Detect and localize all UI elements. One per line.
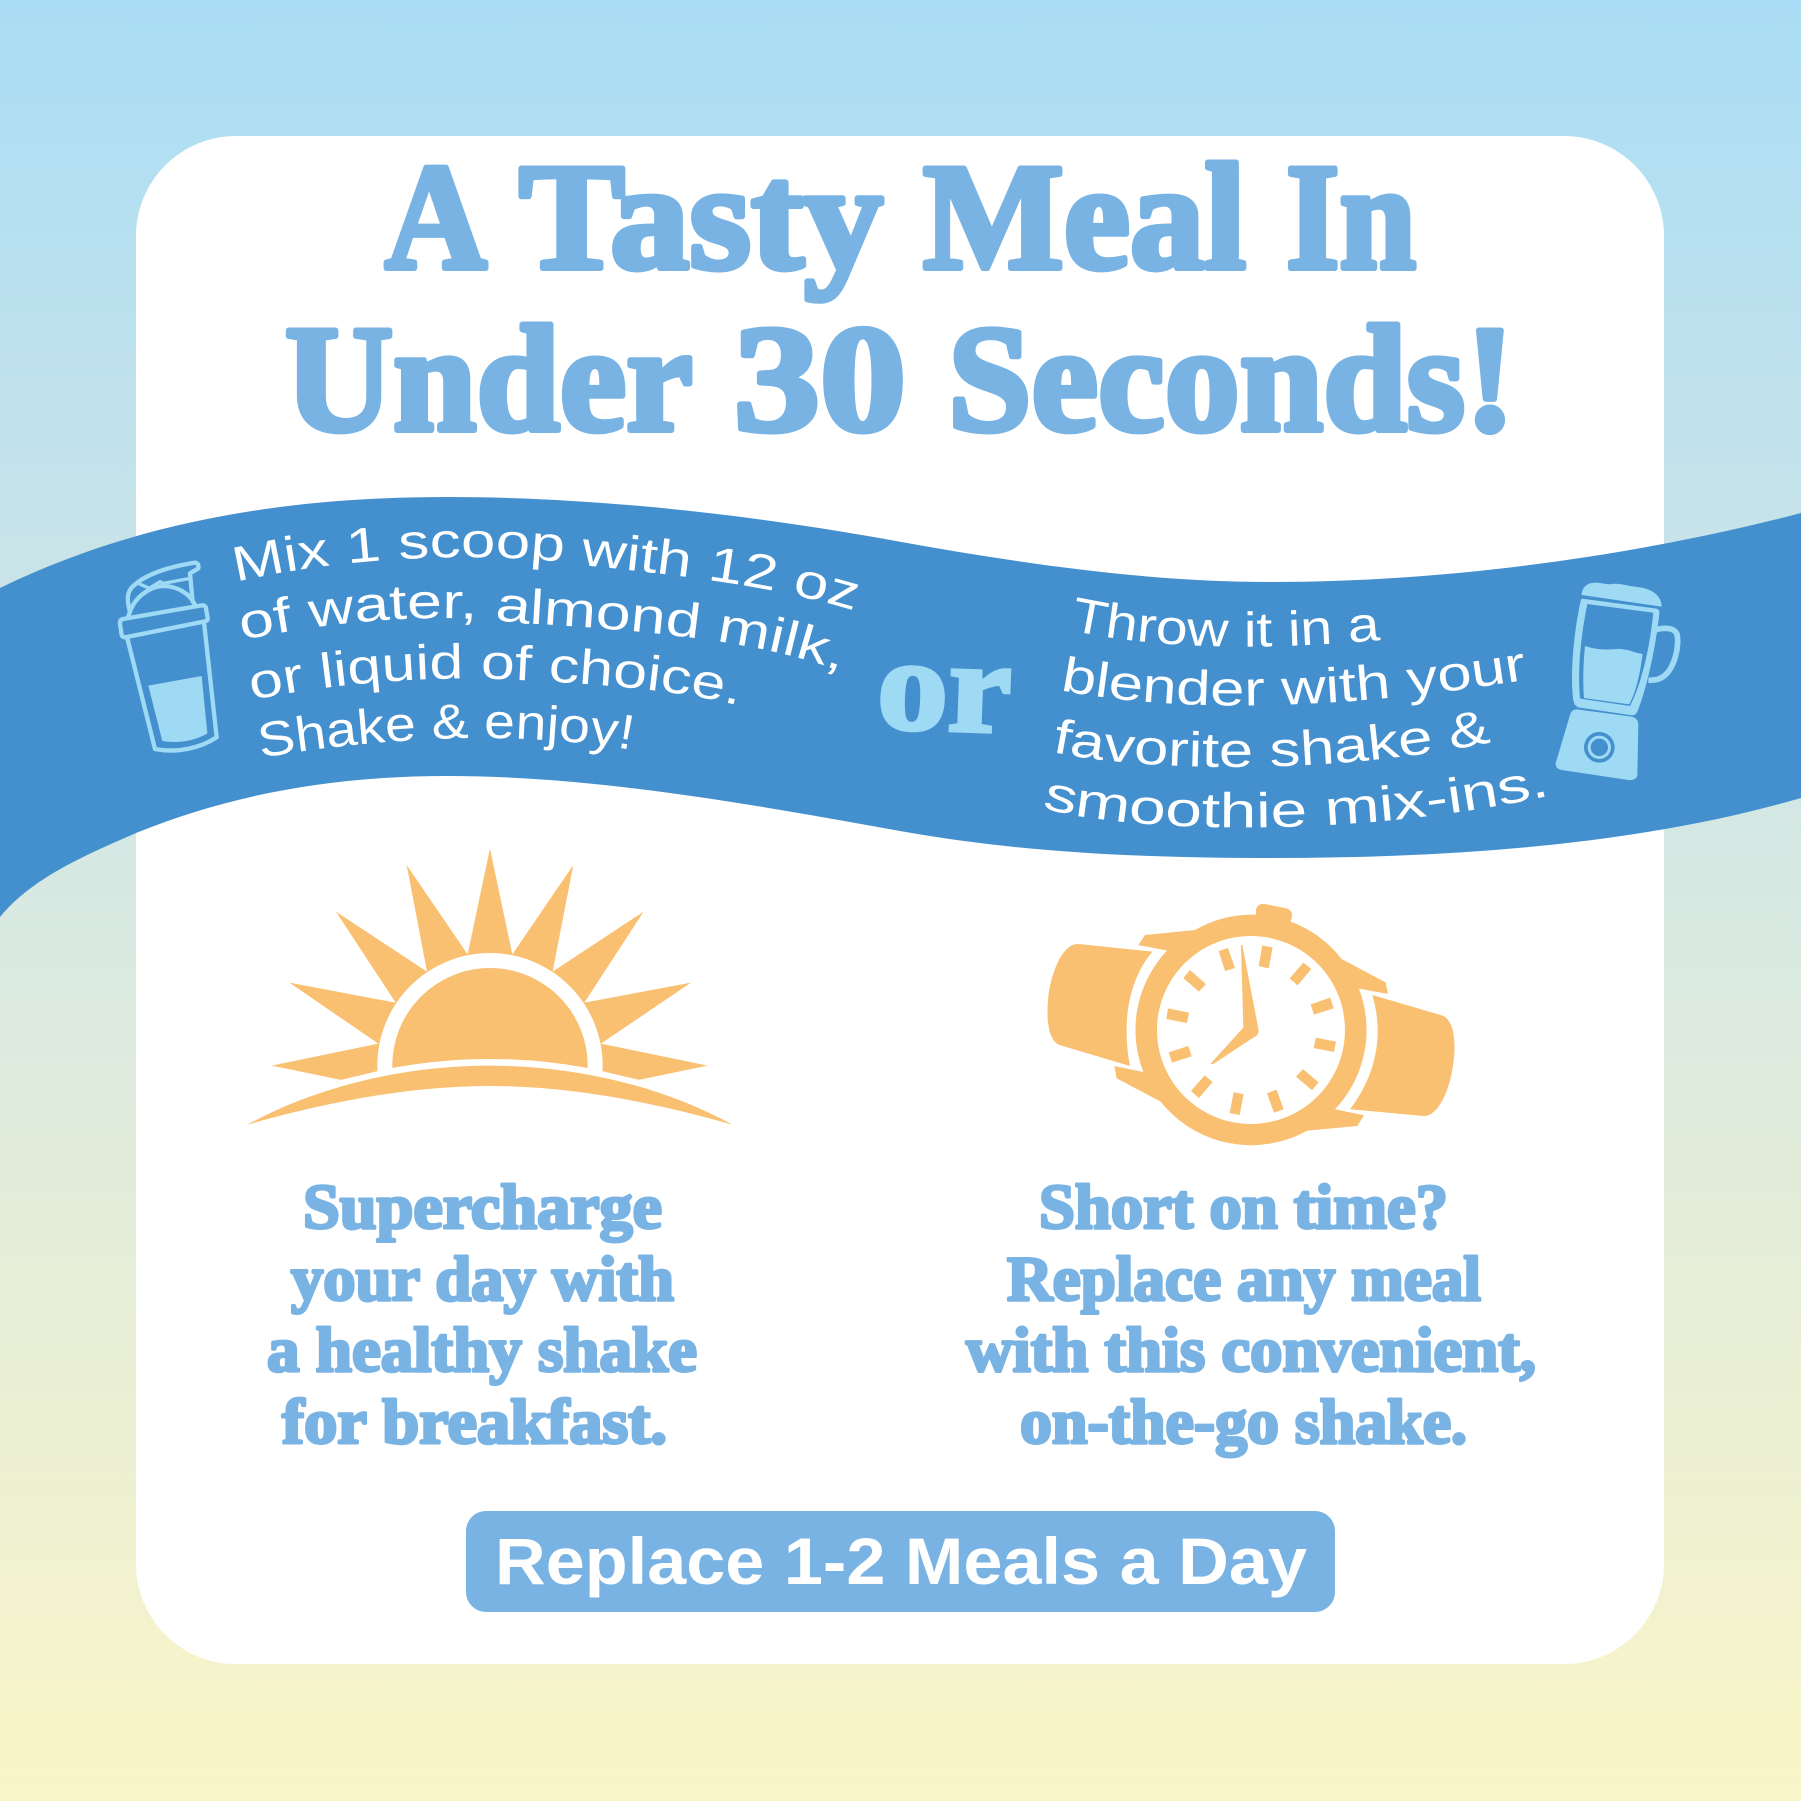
text: short on time: Replace any meal xyxy=(1007,1244,1481,1314)
title: Tasty xyxy=(519,133,883,301)
text: short on time: with this convenient, xyxy=(966,1315,1536,1385)
text: supercharge breakfast: your day with xyxy=(291,1244,674,1314)
title: Meal xyxy=(923,133,1246,301)
text: supercharge breakfast xyxy=(267,1172,697,1457)
text: supercharge breakfast: a healthy shake xyxy=(267,1315,697,1385)
text: or: or xyxy=(875,612,1014,761)
text: shaker instructions: of water, almond milk, xyxy=(242,588,838,674)
text: blender instructions xyxy=(1045,597,1544,828)
title: 30 xyxy=(734,295,906,463)
text: supercharge breakfast: Supercharge xyxy=(303,1172,662,1242)
callout: replace meals button: Replace 1-2 Meals a Day xyxy=(495,1524,1307,1598)
icon: shaker bottle xyxy=(120,563,217,751)
icon: blender xyxy=(1556,583,1678,780)
text: shaker instructions: Shake & enjoy! xyxy=(260,704,632,756)
title: Seconds! xyxy=(948,295,1515,463)
title: A xyxy=(385,133,486,301)
text: short on time: on-the-go shake. xyxy=(1020,1387,1467,1457)
icon: wristwatch xyxy=(1048,904,1455,1145)
text: blender instructions: blender with your xyxy=(1064,654,1523,706)
callout: replace meals button xyxy=(466,1511,1335,1612)
panel: wavy ribbon xyxy=(0,497,1801,917)
icon: sun xyxy=(247,848,732,1178)
text: short on time: Short on time? xyxy=(1039,1172,1448,1242)
text: blender instructions: favorite shake & xyxy=(1056,712,1490,768)
text: short on time xyxy=(966,1172,1536,1457)
title: In xyxy=(1286,133,1416,301)
text: shaker instructions: Mix 1 scoop with 12 oz xyxy=(234,528,858,610)
text: blender instructions: Throw it in a xyxy=(1076,597,1381,647)
panel: white card xyxy=(136,136,1664,1664)
title: Under xyxy=(285,295,690,463)
text: shaker instructions xyxy=(234,528,858,756)
text: shaker instructions: or liquid of choice. xyxy=(252,642,735,704)
text: supercharge breakfast: for breakfast. xyxy=(282,1387,667,1457)
text: blender instructions: smoothie mix-ins. xyxy=(1045,776,1544,828)
title xyxy=(285,133,1515,463)
